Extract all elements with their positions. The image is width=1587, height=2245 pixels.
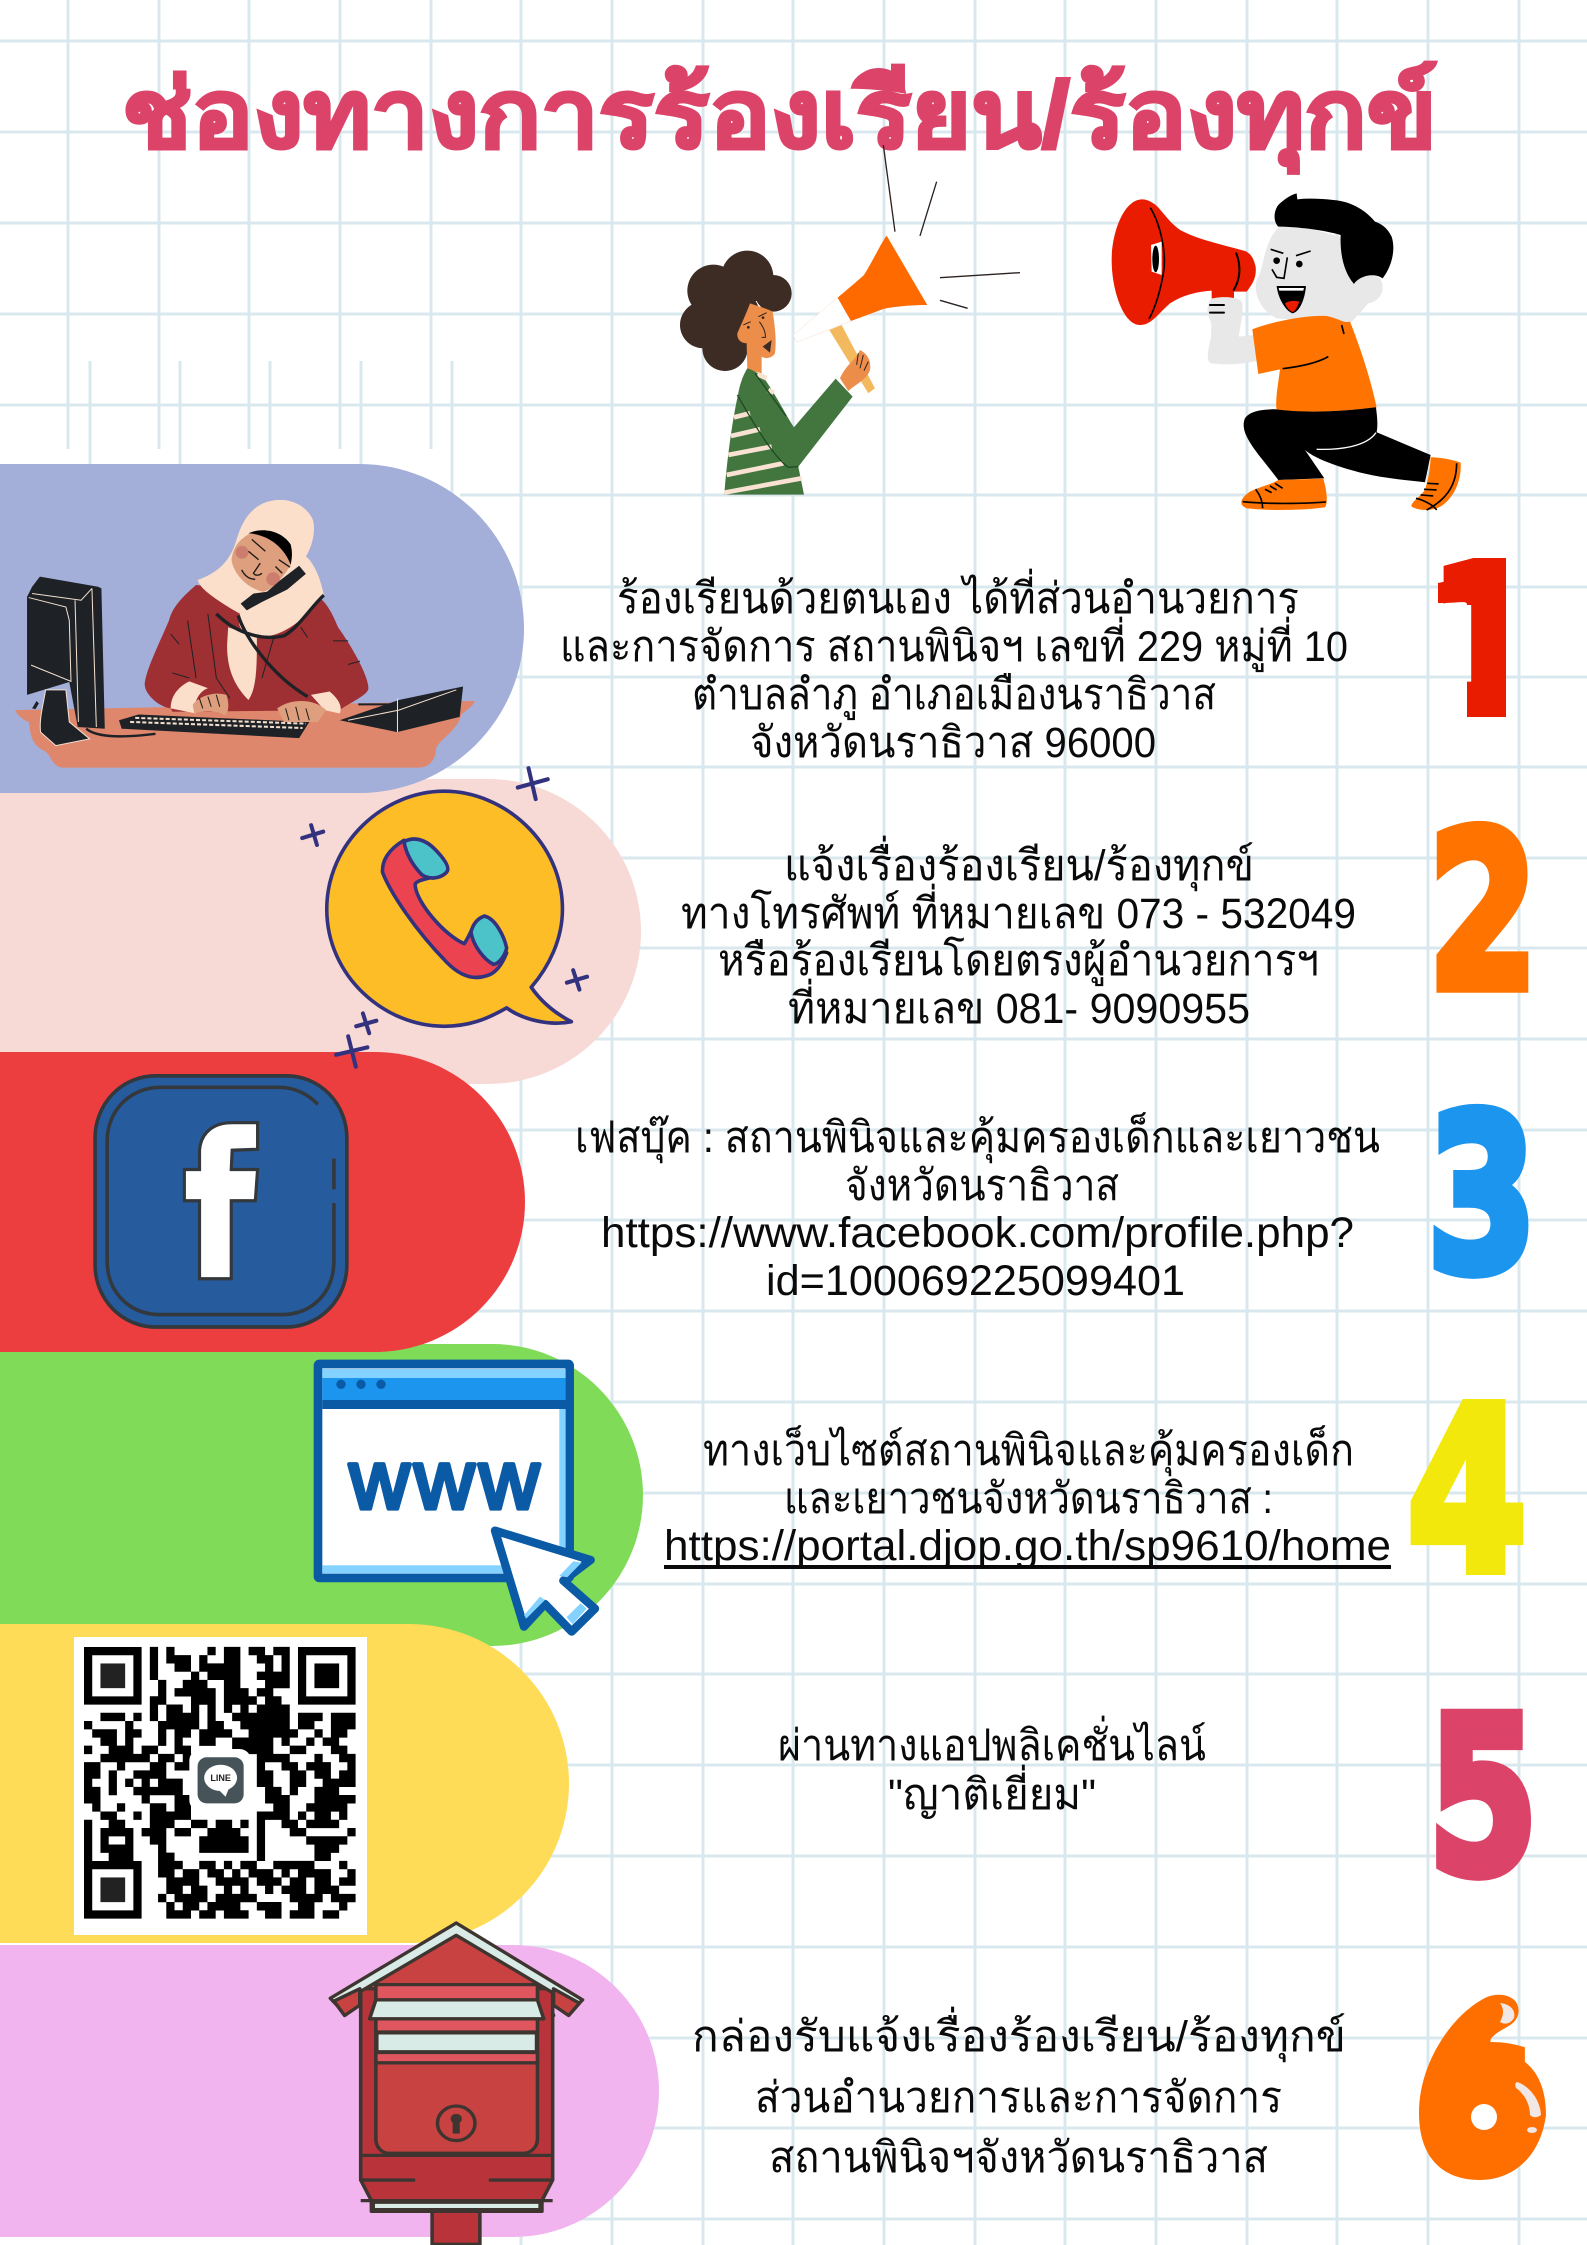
icon: Facebook badge bbox=[95, 1076, 347, 1327]
text block 5: LINE app: ผ่านทางแอปพลิเคชั่นไลน์ bbox=[778, 1716, 1206, 1770]
illustration: woman in hijab on phone at desk bbox=[15, 500, 475, 768]
text block 3: Facebook bbox=[575, 1112, 1380, 1305]
numeral 3: 3 bbox=[1427, 1070, 1537, 1321]
text block 4: website bbox=[664, 1425, 1391, 1570]
numeral 6: 6 bbox=[1424, 2011, 1542, 2209]
text block 6: complaint box: ส่วนอำนวยการและการจัดการ bbox=[755, 2074, 1282, 2122]
panel 4 background: green pill bbox=[0, 1344, 643, 1646]
icon: red mailbox bbox=[330, 1923, 583, 2244]
QR code with LINE logo bbox=[74, 1637, 367, 1935]
text block 2: telephone: ทางโทรศัพท์ ที่หมายเลข 073 - 532049 bbox=[681, 884, 1356, 938]
numeral 5: 5 bbox=[1428, 1672, 1538, 1923]
panel 3 background: red pill bbox=[0, 1052, 525, 1352]
text block 2: telephone: แจ้งเรื่องร้องเรียน/ร้องทุกข์ bbox=[784, 836, 1254, 892]
title: ช่องทางการร้องเรียน/ร้องทุกข์ bbox=[122, 62, 1437, 173]
text block 4: website: ทางเว็บไซต์สถานพินิจและคุ้มครองเด็ก bbox=[703, 1425, 1354, 1477]
text block 1: in-person complaint: จังหวัดนราธิวาส 96000 bbox=[750, 719, 1156, 767]
text block 5: LINE app: "ญาติเยี่ยม" bbox=[888, 1765, 1096, 1819]
panel 2 background: pink pill bbox=[0, 779, 641, 1084]
QR code with LINE logo: LINE bbox=[210, 1773, 231, 1783]
text block 2: telephone bbox=[681, 836, 1356, 1033]
text block 4: website: และเยาวชนจังหวัดนราธิวาส : bbox=[784, 1475, 1273, 1523]
text block 1: in-person complaint bbox=[560, 569, 1348, 767]
numeral 2: 2 bbox=[1428, 787, 1538, 1038]
panel 6 background: violet pill bbox=[0, 1945, 659, 2237]
numeral 1: 1 bbox=[1430, 521, 1542, 763]
panel 1 background: periwinkle pill bbox=[0, 464, 524, 793]
text block 1: in-person complaint: ร้องเรียนด้วยตนเอง ได้ที่ส่วนอำนวยการ bbox=[617, 569, 1299, 623]
text block 3: Facebook: id=100069225099401 bbox=[766, 1257, 1185, 1305]
text block 1: in-person complaint: และการจัดการ สถานพินิจฯ เลขที่ 229 หมู่ที่ 10 bbox=[560, 617, 1348, 673]
text block 5: LINE app bbox=[778, 1716, 1206, 1819]
illustration: woman with megaphone bbox=[680, 145, 1020, 495]
text block 1: in-person complaint: ตำบลลำภู อำเภอเมืองนราธิวาส bbox=[692, 671, 1216, 721]
text block 3: Facebook: จังหวัดนราธิวาส bbox=[845, 1162, 1119, 1210]
numeral 4: 4 bbox=[1408, 1362, 1526, 1623]
icon: browser window with www and cursor: www bbox=[348, 1433, 540, 1526]
text block 6: complaint box: กล่องรับแจ้งเรื่องร้องเรียน/ร้องทุกข์ bbox=[692, 2007, 1346, 2063]
panel 5 background: yellow pill bbox=[0, 1624, 569, 1943]
illustration: boy shouting into megaphone bbox=[1112, 193, 1461, 510]
text block 4: website: https://portal.djop.go.th/sp9610/home bbox=[664, 1522, 1391, 1570]
text block 6: complaint box bbox=[692, 2007, 1346, 2182]
text block 2: telephone: ที่หมายเลข 081- 9090955 bbox=[788, 979, 1250, 1033]
text block 3: Facebook: เฟสบุ๊ค : สถานพินิจและคุ้มครองเด็กและเยาวชน bbox=[575, 1112, 1380, 1164]
text block 6: complaint box: สถานพินิจฯจังหวัดนราธิวาส bbox=[769, 2134, 1268, 2182]
icon: browser window with www and cursor bbox=[318, 1364, 595, 1632]
icon: phone speech bubble bbox=[302, 768, 587, 1067]
text block 2: telephone: หรือร้องเรียนโดยตรงผู้อำนวยการฯ bbox=[718, 936, 1319, 987]
text block 3: Facebook: https://www.facebook.com/profile.php? bbox=[601, 1209, 1354, 1257]
numeral 1 bbox=[1438, 558, 1506, 717]
